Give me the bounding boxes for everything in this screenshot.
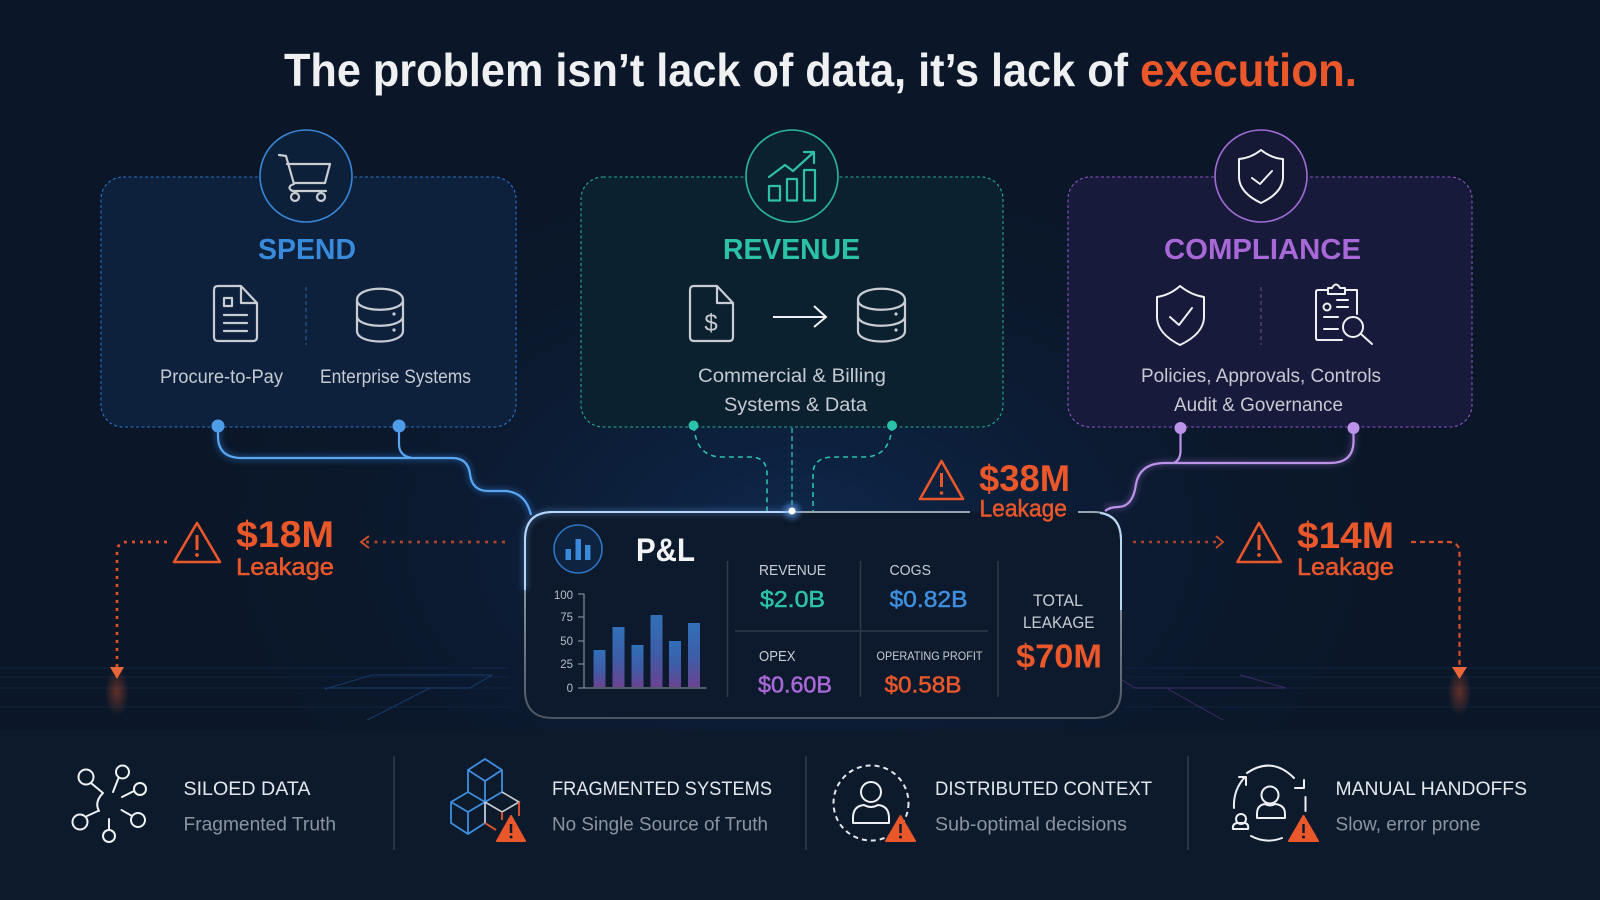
label: policies and audit [1141,366,1381,416]
callout: $38M leakage: Leakage [980,496,1067,522]
metric: total leakage: TOTAL [1033,592,1083,610]
icon: document [214,286,257,341]
callout: $14M leakage: Leakage [1297,554,1394,581]
icon: growth chart badge [746,130,838,222]
arrow: compliance leakage to floor [1133,536,1472,716]
metric: revenue [759,563,826,612]
icon: warning filled [497,816,525,841]
metric: total leakage: LEAKAGE [1023,614,1094,632]
label: policies and audit: Audit & Governance [1174,395,1343,416]
bar chart: 0 [567,683,573,695]
label: policies and audit: Policies, Approvals, Controls [1141,366,1381,387]
item: fragmented systems [451,759,772,841]
icon: audit clipboard [1316,284,1372,344]
metric: operating profit: $0.58B [884,672,962,698]
label: commercial and billing: Systems & Data [724,395,867,416]
arrow: spend leakage to floor [105,536,505,716]
item: fragmented systems: No Single Source of Truth [552,814,768,836]
icon: shopping cart badge [260,130,352,222]
metric: operating profit [876,649,983,698]
icon: distributed person [834,766,915,841]
metric: opex: $0.60B [758,672,832,698]
icon: invoice [690,286,733,341]
icon: p&l badge [554,525,602,573]
metric: total leakage: $70M [1016,638,1102,674]
icon: siloed nodes [72,766,146,842]
label: commercial and billing: Commercial & Billing [698,366,886,387]
icon: warning [1238,523,1281,562]
item: manual handoffs: Slow, error prone [1336,814,1480,836]
metric: operating profit: OPERATING PROFIT [876,649,983,663]
connector: revenue lines [694,426,892,512]
item: distributed context [834,766,1152,841]
callout: $38M leakage: $38M [979,458,1070,499]
panel: p&l card [525,512,1121,718]
center connector glow [780,499,804,523]
callout: $38M leakage [920,458,1070,522]
callout: $18M leakage: $18M [236,514,334,555]
connector dots [1174,422,1360,434]
title: The problem isn’t lack of data, it’s lack of [284,44,1129,96]
item: distributed context: DISTRIBUTED CONTEXT [935,779,1152,800]
icon: database [858,289,905,342]
metric: revenue: $2.0B [760,586,825,612]
icon: warning filled [1289,816,1318,841]
icon: database [357,289,403,342]
arrow [773,306,826,327]
icon: fragmented cubes [451,759,525,841]
heading: p&l: P&L [636,532,695,568]
item: distributed context: Sub-optimal decisions [935,814,1127,836]
bar chart [554,590,706,695]
bottom strip [72,756,1527,850]
connector: spend lines [218,426,531,515]
bar chart: 75 [560,612,573,624]
item: fragmented systems: FRAGMENTED SYSTEMS [552,779,772,800]
metric: revenue: REVENUE [759,563,826,579]
metric: cogs: COGS [890,563,931,579]
item: siloed data: Fragmented Truth [184,814,336,836]
heading: compliance: COMPLIANCE [1164,234,1361,266]
title: execution. [1140,44,1357,96]
item: siloed data [72,766,336,842]
icon: invoice: $ [704,310,718,337]
panel: compliance [1068,130,1472,434]
label: procure-to-pay: Procure-to-Pay [160,367,283,388]
icon: warning [920,461,963,499]
metric: total leakage [1016,592,1102,674]
callout: $18M leakage [174,514,334,581]
bar chart: 50 [560,636,573,648]
bar chart: 100 [554,590,573,602]
panel: spend [101,130,516,432]
item: manual handoffs: MANUAL HANDOFFS [1336,779,1527,800]
connector: compliance lines [1105,428,1354,511]
icon: warning [174,523,220,562]
callout: $14M leakage: $14M [1297,515,1394,556]
bar chart: 25 [560,659,573,671]
callout: $14M leakage [1238,515,1394,581]
connector dots [212,420,406,432]
metric: opex [758,649,832,698]
item: manual handoffs [1233,766,1527,841]
icon: shield [1157,286,1204,345]
item: siloed data: SILOED DATA [184,779,311,800]
metric: cogs: $0.82B [890,586,968,612]
label: commercial and billing [698,366,886,416]
metric: opex: OPEX [759,649,796,665]
connector dots [688,420,897,430]
metric: cogs [890,563,968,612]
callout: $18M leakage: Leakage [236,554,334,581]
panel: revenue [581,130,1003,430]
icon: manual handoff cycle [1233,766,1306,841]
icon: warning filled [886,816,915,841]
icon: shield badge [1215,130,1307,222]
label: enterprise systems: Enterprise Systems [320,367,471,388]
heading: spend: SPEND [258,234,356,266]
heading: revenue: REVENUE [723,234,860,266]
